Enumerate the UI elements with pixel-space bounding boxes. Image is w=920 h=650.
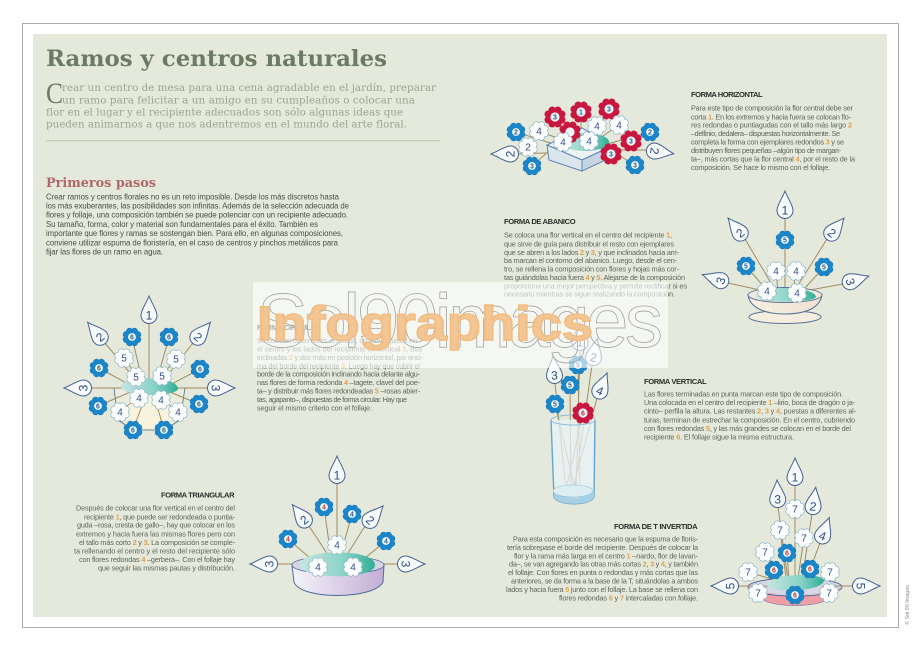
round flowers: 5 [568, 383, 572, 390]
pointed flowers [64, 296, 235, 396]
blue flowers: 4 [322, 505, 326, 512]
white flowers: 5 [159, 372, 165, 382]
text: forma circular: ma del borde del recipiente 3. Luego hay que cubrir el [257, 362, 420, 370]
text: forma de T invertida: tería sobrepase el borde del recipiente. Después de colocar la [507, 543, 699, 552]
white flowers: 2 [525, 142, 531, 154]
text: forma de T invertida: lados y hacia fuera 5 junto con el follaje. La base se rellena con [506, 585, 698, 594]
white flowers [758, 262, 806, 302]
text: forma triangular [74, 504, 236, 573]
blue flowers: 6 [97, 366, 101, 373]
round flowers: 6 [581, 411, 585, 418]
text: forma circular [257, 336, 424, 412]
text: forma triangular: que seguir las mismas pautas y distribución. [98, 564, 235, 573]
heading: forma vertical: FORMA VERTICAL [644, 377, 707, 386]
text: forma triangular: recipiente 1, que puede ser redondeada o puntia- [84, 512, 236, 521]
text: forma circular: tas, agapanto–, dispuestas de forma circular. Hay que [257, 395, 407, 404]
diagram: forma circular [64, 296, 235, 439]
text: forma circular: seguir el mismo criterio con el follaje. [257, 404, 372, 412]
pointed flowers [700, 191, 871, 292]
pointed flowers [491, 142, 675, 162]
heading: forma circular: FORMA CIRCULAR [257, 323, 321, 332]
blue flowers: 4 [350, 512, 354, 519]
white flowers: 7 [755, 588, 761, 600]
blue flowers: 5 [783, 238, 787, 245]
round flowers: 5 [553, 402, 557, 409]
pointed flowers: 3 [208, 385, 222, 392]
text: forma vertical: turas, terminan de estrechar la composición. En el centro, cubriendo [644, 415, 855, 424]
stems [91, 323, 208, 430]
white flowers: 4 [334, 540, 340, 552]
text: primeros pasos: los más exuberantes, las posibilidades son infinitas. Además de la selección adecuada de [46, 202, 349, 210]
intro text block [46, 77, 436, 131]
red flowers: 3 [607, 107, 611, 114]
white flowers: 5 [173, 354, 179, 366]
text: primeros pasos: importante que flores y ramas se sostengan bien. Para ello, en algunas composiciones, [46, 229, 343, 238]
text: forma circular: Se colocan cinco flores en punta, una en posición en [257, 336, 417, 345]
white flowers: 7 [792, 504, 798, 516]
pointed flowers: 3 [262, 560, 276, 567]
watermark: Sol90images: Sol90images [257, 279, 663, 364]
credit: © Sol 90 Images [904, 585, 911, 625]
text: forma vertical: recipiente 6. El follaje sigue la misma estructura. [644, 432, 794, 441]
text: forma de T invertida: flores redondas 6 y 7 intercaladas con follaje. [559, 594, 698, 603]
pointed flowers: 1 [792, 470, 799, 484]
diagram: forma triangular [250, 456, 425, 596]
white flowers: 4 [117, 408, 123, 418]
text: primeros pasos: Su tamaño, forma, color y material son fundamentales para el éxito. También es [46, 220, 318, 229]
white flowers: 5 [133, 372, 139, 384]
pointed flowers: 2 [809, 499, 818, 514]
text: forma de abanico: que sirve de guía para distribuir el resto con ejemplares [504, 239, 674, 248]
white flowers: 7 [762, 548, 768, 558]
pointed flowers: 2 [504, 150, 518, 157]
text: forma de T invertida: anteriores, se da forma a la base de la T, situándolas a ambos [511, 576, 698, 586]
blue flowers: 6 [808, 567, 812, 574]
pointed flowers: 2 [589, 350, 598, 365]
text: forma triangular: Después de colocar una flor vertical en el centro del [76, 504, 235, 513]
blue flowers: 6 [198, 367, 202, 374]
white flowers: 4 [315, 562, 321, 574]
pointed flowers: 1 [782, 204, 789, 218]
text: forma de T invertida: flor y la rama más larga en el centro 1 –nardo, flor de lavan- [514, 551, 699, 560]
white flowers: 5 [121, 354, 127, 364]
text: forma de abanico: necesario mientras se sigue realizando la composición. [504, 290, 675, 299]
blue flowers: 6 [96, 404, 100, 411]
text: forma horizontal: corta 1. En los extremos y hacia fuera se colocan flo- [691, 112, 852, 121]
text: forma vertical: Una colocada en el centro del recipiente 1 –lirio, boca de dragón o ja- [644, 398, 856, 407]
white flowers: 7 [801, 534, 807, 544]
white flowers: 4 [793, 266, 799, 278]
pointed flowers [711, 458, 880, 594]
red flowers: 3 [629, 139, 633, 146]
white flowers: 7 [745, 568, 751, 578]
white flowers [739, 500, 839, 602]
stems [277, 483, 398, 564]
dish [292, 565, 384, 596]
bowl [748, 295, 822, 314]
white flowers [309, 536, 362, 576]
text: forma de abanico: ba marcan el contorno del abanico. Luego, desde el cen- [504, 256, 678, 265]
white flowers: 4 [794, 288, 800, 300]
text: forma circular: inclinadas 2 y dos más en posición horizontal, por enci- [257, 353, 424, 362]
text: forma vertical: con flores redondas 5, y las más grandes se colocan en el borde del [644, 424, 851, 433]
white flowers: 4 [536, 126, 542, 138]
pointed flowers: 2 [825, 226, 839, 241]
stems [555, 350, 597, 492]
text: forma horizontal: distribuyen flores pequeñas –algún tipo de margari- [691, 146, 842, 155]
heading: forma de T invertida: FORMA DE T INVERTIDA [614, 522, 698, 531]
red flowers: 3 [609, 152, 613, 159]
text: forma horizontal [691, 104, 856, 172]
text: forma horizontal: completa la forma con ejemplares redondos 3 y se [691, 137, 844, 146]
text: forma de T invertida: el follaje. Con flores en punta o redondas y más cortas que las [508, 568, 698, 577]
blue flowers: 6 [130, 335, 134, 342]
pointed flowers: 1 [577, 336, 584, 350]
white flowers: 4 [773, 266, 779, 278]
intro text block: un ramo para felicitar a un amigo en su cumpleaños o colocar una [62, 96, 415, 106]
text: forma de abanico: Se coloca una flor vertical en el centro del recipiente 1, [504, 231, 672, 240]
text: forma triangular: extremos y hacia fuera las mismas flores pero con [76, 529, 235, 538]
white flowers: 4 [594, 122, 600, 132]
pointed flowers: 1 [146, 308, 153, 322]
intro text block: pueden animarnos a que nos adentremos en el mundo del arte floral. [46, 120, 407, 131]
text: forma triangular: con flores redondas 4 –gerbera–. Con el follaje hay [79, 555, 235, 564]
white flowers: 4 [586, 136, 592, 148]
text: primeros pasos: fijar las flores de un ramo en agua. [46, 248, 163, 257]
white flowers: 4 [136, 394, 142, 404]
text: forma de abanico [504, 231, 687, 299]
blue flowers: 3 [530, 164, 534, 171]
pointed flowers [545, 323, 615, 401]
round flowers: 5 [576, 363, 580, 370]
text: forma de abanico: que se abren a los lados 2 y 3, y que inclinados hacia arri- [504, 248, 680, 257]
diagram: forma de abanico [700, 191, 871, 324]
white flowers: 4 [764, 286, 770, 298]
blue flowers: 4 [286, 537, 290, 544]
blue flowers: 5 [744, 264, 748, 271]
pointed flowers: 3 [843, 277, 858, 287]
text: forma triangular: ta rellenando el centro y el resto del recipiente sólo [74, 546, 235, 555]
text: forma horizontal: Para este tipo de composición la flor central debe ser [691, 104, 854, 113]
blue flowers: 2 [514, 130, 518, 137]
floral foam [300, 552, 375, 576]
title: Ramos y centros naturales [46, 46, 387, 72]
text: forma de T invertida: Para esta composición es necesario que la espuma de floris- [513, 535, 699, 544]
pointed flowers: 2 [191, 330, 205, 345]
heading: forma de abanico: FORMA DE ABANICO [504, 217, 576, 226]
round flowers [546, 356, 593, 423]
blue flowers [507, 123, 659, 175]
red flowers [545, 99, 641, 164]
pointed flowers: 4 [594, 383, 606, 399]
white flowers: 4 [175, 408, 181, 418]
diagram: forma horizontal [491, 99, 675, 175]
text: primeros pasos: conviene utilizar espuma de floristería, en el caso de centros y pinchos metálicos para [46, 238, 339, 248]
blue flowers: 6 [772, 568, 776, 575]
blue flowers: 6 [197, 402, 201, 409]
pointed flowers: 4 [817, 528, 828, 544]
blue flowers: 4 [384, 539, 388, 546]
pointed flowers: 3 [76, 384, 90, 391]
text: forma circular: nas flores de forma redonda 4 –tagete, clavel del poe- [257, 378, 421, 387]
blue flowers: 5 [822, 265, 826, 272]
text: forma horizontal: ta–, más cortas que la flor central 4, por el resto de la [691, 154, 856, 163]
pointed flowers: 5 [854, 583, 868, 590]
blue flowers [737, 231, 833, 276]
text: forma horizontal: res redondas o puntiagudas con el tallo más largo 2 [691, 121, 852, 130]
blue flowers: 6 [793, 593, 797, 600]
white flowers: 7 [826, 588, 832, 600]
stems [738, 485, 853, 586]
drop cap: C [46, 77, 63, 110]
intro text block: rear un centro de mesa para una cena agradable en el jardín, preparar [62, 83, 436, 94]
white flowers [519, 116, 628, 156]
watermark: Infographics: Infographics [257, 298, 593, 351]
text: forma circular: ta– y distribuir más flores redondeadas 5 –rosas abier- [257, 386, 421, 396]
vase [114, 388, 185, 430]
pointed flowers: 1 [334, 468, 341, 482]
pointed flowers: 2 [93, 330, 107, 345]
floral foam [767, 575, 824, 591]
blue flowers: 2 [648, 130, 652, 137]
pointed flowers: 3 [774, 492, 782, 507]
blue flowers: 6 [785, 551, 789, 558]
pointed flowers: 3 [713, 275, 729, 286]
blue flowers: 6 [167, 335, 171, 342]
text: primeros pasos: Crear ramos y centros florales no es un reto imposible. Desde los más discretos hasta [46, 192, 340, 201]
red flowers: 3 [553, 115, 557, 122]
white flowers: 7 [827, 568, 833, 578]
heading: forma triangular: FORMA TRIANGULAR [161, 491, 235, 500]
floral foam [561, 133, 609, 151]
text: primeros pasos: flores y follaje, una composición también se puede potenciar con un recipiente adecuado. [46, 211, 348, 220]
white flowers: 7 [777, 526, 783, 536]
text: forma circular: el centro y los lados del recipiente en vertical 1, dos [257, 344, 422, 354]
text: forma de abanico: tro, se rellena la composición con flores y hojas más cor- [504, 264, 680, 274]
blue flowers: 6 [131, 428, 135, 435]
pointed flowers: 2 [733, 225, 748, 241]
white flowers: 4 [616, 120, 622, 132]
text: forma circular: borde de la composición inclinando hacia delante algu- [257, 370, 421, 378]
intro text block: flor en el lugar y el recipiente adecuados son sólo algunas ideas que [46, 108, 403, 118]
text: forma de abanico: proporciona una mejor perspectiva y permite rectificar si es [504, 281, 687, 290]
pointed flowers: 3 [398, 561, 412, 568]
text: forma de abanico: tas guiándolas hacia fuera 4 y 5. Alejarse de la composición [504, 273, 685, 282]
pointed flowers: 2 [297, 512, 312, 528]
stems [728, 218, 843, 295]
white flowers: 4 [350, 562, 356, 574]
diagram: forma de T invertida [711, 458, 880, 606]
text: forma triangular: el tallo más corto 2 y 3. La composición se comple- [79, 538, 236, 547]
watermark overlay [253, 279, 668, 368]
pointed flowers: 3 [551, 368, 559, 383]
blue flowers: 6 [162, 428, 166, 435]
text: forma de T invertida [506, 535, 699, 603]
pointed flowers: 2 [647, 147, 662, 156]
white flowers: 4 [158, 396, 164, 406]
white flowers: 4 [560, 138, 566, 148]
pointed flowers: 2 [363, 513, 377, 528]
bowl base [749, 310, 821, 324]
glass vase [551, 415, 595, 504]
pointed flowers [250, 456, 425, 572]
white flowers [111, 349, 187, 421]
text: forma horizontal: composición. Se hace lo mismo con el follaje. [691, 163, 830, 172]
heading: primeros pasos: Primeros pasos [46, 176, 156, 191]
text: forma triangular: guda –rosa, cresta de gallo–, hay que colocar en los [77, 521, 235, 530]
box container [547, 128, 612, 171]
blue flowers [765, 544, 819, 604]
blue flowers [279, 498, 395, 550]
text: forma vertical: cinto– perfila la altura. Las restantes 2, 3 y 4, puestas a diferentes al- [644, 407, 857, 416]
text: forma vertical: Las flores terminadas en punta marcan este tipo de composición. [644, 390, 843, 399]
blue flowers: 3 [633, 163, 637, 170]
plate [748, 578, 842, 606]
text: forma horizontal: –delfinio, dedalera– dispuestas horizontalmente. Se [691, 129, 840, 138]
floral foam [121, 378, 178, 395]
stems [516, 109, 650, 166]
heading: forma horizontal: FORMA HORIZONTAL [691, 90, 763, 99]
blue flowers [89, 328, 209, 439]
text: primeros pasos [46, 192, 349, 257]
pointed flowers: 5 [724, 582, 738, 589]
floral foam [756, 288, 816, 302]
text: forma vertical [644, 390, 857, 441]
red flowers: 1 [579, 110, 583, 117]
text: forma de T invertida: da–, se van agregando las otras más cortas 2, 3 y 4, y también [509, 560, 698, 569]
diagram: forma vertical [545, 323, 615, 504]
